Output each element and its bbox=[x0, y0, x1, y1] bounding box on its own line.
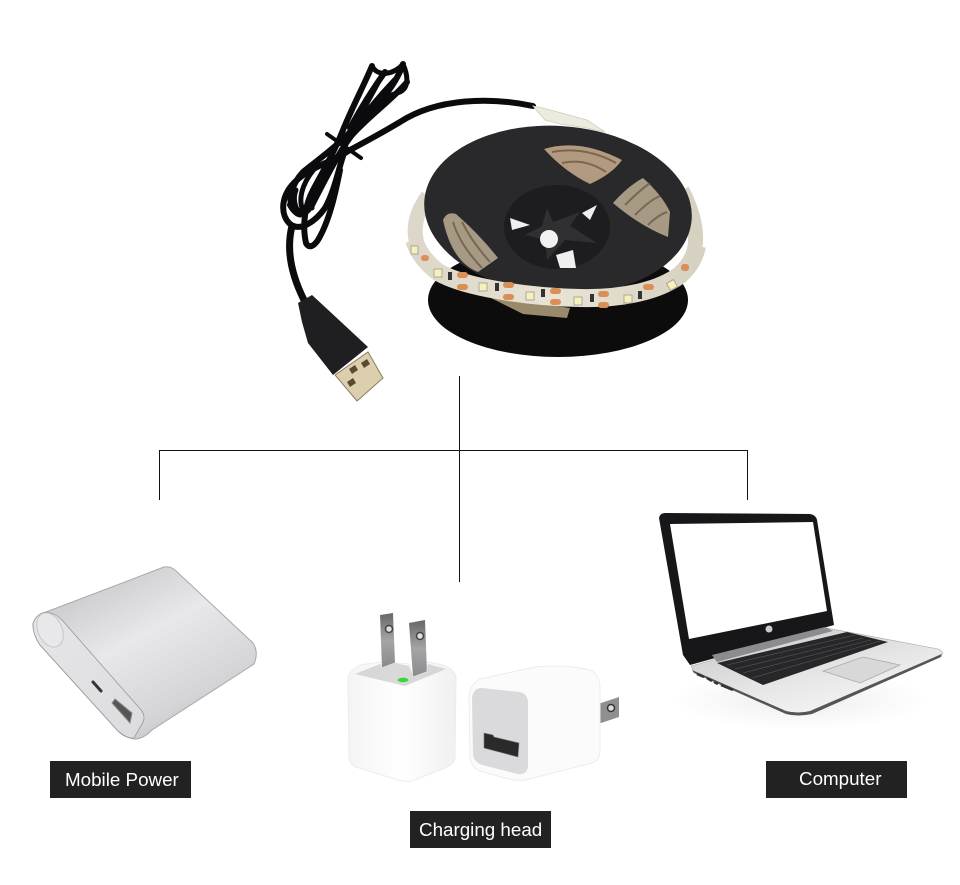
bank front face bbox=[33, 612, 144, 738]
screen bbox=[670, 522, 827, 639]
side prong bbox=[598, 697, 619, 724]
left prong bbox=[380, 613, 395, 668]
bank body bbox=[33, 567, 256, 739]
micro USB port bbox=[93, 682, 101, 691]
label: Charging head: Charging head bbox=[419, 819, 542, 840]
photo: power bank bbox=[32, 567, 256, 739]
label: Mobile Power bbox=[50, 761, 191, 798]
photo: laptop bbox=[659, 513, 942, 730]
green LED bbox=[398, 678, 408, 682]
HP logo bbox=[766, 626, 772, 632]
reel hub bbox=[504, 185, 610, 269]
rear cube bbox=[469, 666, 600, 780]
keyboard bbox=[717, 632, 888, 685]
USB port bbox=[112, 699, 132, 723]
desk shadow bbox=[670, 670, 930, 730]
window stripes bbox=[453, 150, 667, 268]
USB metal connector bbox=[335, 352, 383, 401]
strip seen below reel bbox=[487, 296, 570, 318]
USB face bbox=[472, 688, 528, 774]
connector lines bbox=[160, 376, 748, 582]
USB plug housing bbox=[298, 295, 368, 375]
LEDs and resistors bbox=[411, 246, 689, 308]
base front edge bbox=[692, 654, 942, 716]
LED strip back section bbox=[415, 190, 696, 298]
side ports bbox=[697, 674, 733, 690]
photo: charging heads bbox=[348, 613, 619, 781]
laptop lid bbox=[659, 513, 834, 665]
reel windows bbox=[443, 145, 670, 272]
USB socket bbox=[484, 733, 519, 757]
reel lower flange bbox=[428, 243, 688, 357]
power button bbox=[32, 609, 68, 651]
label: Computer bbox=[766, 761, 907, 798]
USB cable coil bbox=[283, 64, 533, 300]
reel top disc bbox=[418, 117, 698, 303]
right prong bbox=[409, 620, 427, 677]
front cube bbox=[348, 662, 456, 781]
label: Mobile Power: Mobile Power bbox=[65, 769, 179, 790]
cube top inset bbox=[355, 663, 446, 686]
laptop base bbox=[691, 628, 942, 714]
photo: USB LED strip reel with cable bbox=[283, 64, 698, 401]
hinge bbox=[712, 627, 833, 662]
label: Charging head bbox=[410, 811, 551, 848]
label: Computer: Computer bbox=[799, 768, 881, 789]
touchpad bbox=[823, 657, 900, 683]
wire sleeve bbox=[533, 106, 605, 132]
keyboard key rows bbox=[727, 635, 880, 678]
LED strip band bbox=[411, 240, 697, 308]
